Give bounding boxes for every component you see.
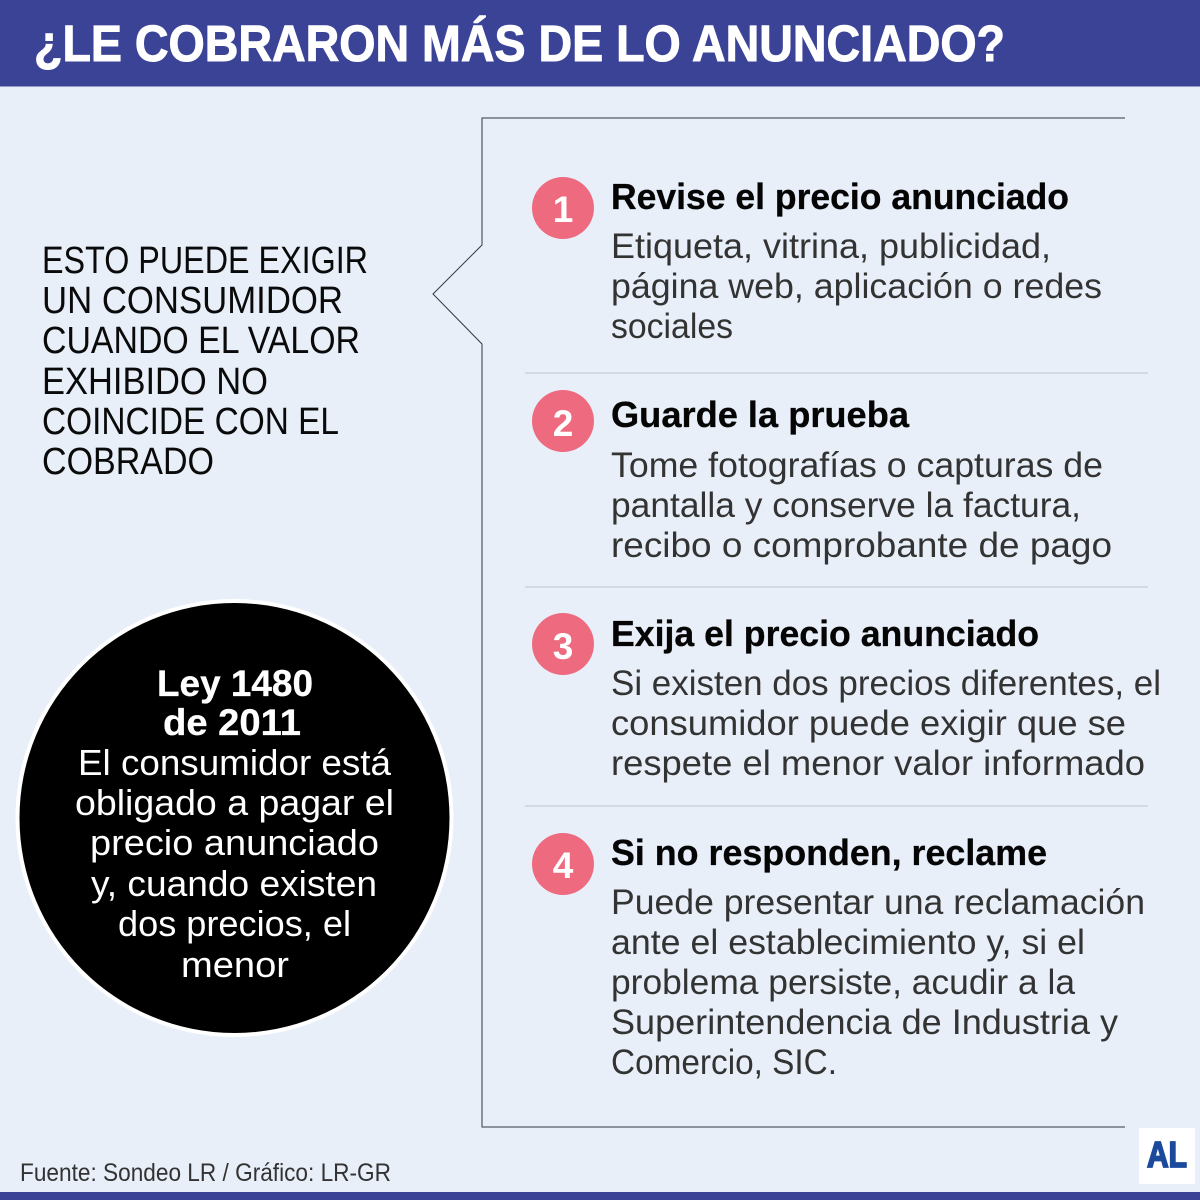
law circle callout xyxy=(16,599,454,1037)
icon: number 4 badge xyxy=(532,833,594,895)
law text: dos precios, el xyxy=(118,903,351,944)
step 1 body: página web, aplicación o redes xyxy=(611,267,1102,306)
icon: number 3 badge xyxy=(532,613,594,675)
step 3 body: respete el menor valor informado xyxy=(611,744,1145,783)
title: ¿LE COBRARON MÁS DE LO ANUNCIADO? xyxy=(34,15,1005,72)
step 2 body: Tome fotografías o capturas de xyxy=(611,446,1103,485)
step 3 body xyxy=(611,664,1161,783)
logo: AL xyxy=(1139,1128,1195,1184)
icon: number 2 badge xyxy=(532,390,594,452)
icon: number 1 badge: 1 xyxy=(553,189,573,230)
step 1 heading: Revise el precio anunciado xyxy=(611,176,1069,217)
step 4 body: Comercio, SIC. xyxy=(611,1043,837,1082)
step 4 body: problema persiste, acudir a la xyxy=(611,963,1076,1002)
step 2 body: recibo o comprobante de pago xyxy=(611,526,1112,565)
step 3 body: consumidor puede exigir que se xyxy=(611,704,1126,743)
law text: menor xyxy=(181,944,289,985)
law text: obligado a pagar el xyxy=(75,782,394,823)
law text xyxy=(75,742,394,985)
step 4 body xyxy=(611,883,1145,1082)
step 2 body xyxy=(611,446,1112,565)
logo: AL: AL xyxy=(1147,1134,1187,1175)
step 1 body: Etiqueta, vitrina, publicidad, xyxy=(611,227,1051,266)
source note: Fuente: Sondeo LR / Gráfico: LR-GR xyxy=(20,1159,391,1187)
law text: y, cuando existen xyxy=(91,863,377,904)
intro text block: CUANDO EL VALOR xyxy=(42,320,360,362)
law heading: de 2011 xyxy=(163,702,301,743)
step 2 xyxy=(532,390,1112,565)
step 4 body: ante el establecimiento y, si el xyxy=(611,923,1085,962)
step 3 body: Si existen dos precios diferentes, el xyxy=(611,664,1161,703)
step 1 body: sociales xyxy=(611,307,733,346)
header banner xyxy=(0,0,1200,86)
step 4 heading: Si no responden, reclame xyxy=(611,832,1047,873)
law heading: Ley 1480 xyxy=(157,663,313,704)
law text: precio anunciado xyxy=(90,822,379,863)
icon: number 3 badge: 3 xyxy=(553,626,573,667)
intro text block: EXHIBIDO NO xyxy=(42,361,268,403)
step 2 body: pantalla y conserve la factura, xyxy=(611,486,1081,525)
icon: number 1 badge xyxy=(532,177,594,239)
footer bar xyxy=(0,1192,1200,1200)
intro text block: COINCIDE CON EL xyxy=(42,401,339,443)
icon: number 4 badge: 4 xyxy=(553,845,574,886)
intro text block: ESTO PUEDE EXIGIR xyxy=(42,240,368,282)
law text: El consumidor está xyxy=(78,742,392,783)
step 4 xyxy=(532,832,1145,1082)
intro text block: UN CONSUMIDOR xyxy=(42,280,343,322)
step 2 heading: Guarde la prueba xyxy=(611,394,910,435)
step 3 heading: Exija el precio anunciado xyxy=(611,613,1039,654)
step 3 xyxy=(532,613,1161,783)
callout bracket with pointer xyxy=(433,118,1125,1127)
icon: number 2 badge: 2 xyxy=(553,403,573,444)
intro text block xyxy=(42,240,368,483)
law heading xyxy=(157,663,313,743)
step 1 xyxy=(532,176,1102,346)
step 1 body xyxy=(611,227,1102,346)
intro text block: COBRADO xyxy=(42,441,214,483)
step 4 body: Superintendencia de Industria y xyxy=(611,1003,1119,1042)
step 4 body: Puede presentar una reclamación xyxy=(611,883,1145,922)
